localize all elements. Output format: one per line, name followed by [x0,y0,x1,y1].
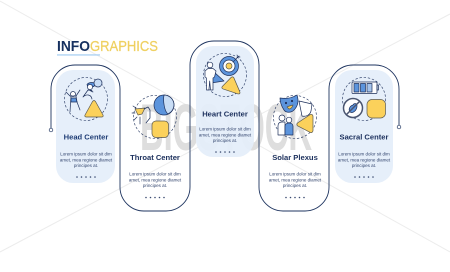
text block: amet, mea regione diamet [60,157,113,162]
heading: Solar Plexus [272,153,318,162]
icon: solar plexus [274,95,316,138]
text block: principes at. [352,163,376,168]
text block: Lorem ipsum dolor sit dim [60,152,112,156]
panel: head center [60,78,113,178]
text block: Lorem ipsum dolor sit dim [338,152,390,156]
text block: principes at. [74,163,98,168]
text block: amet, mea regione diamet [338,157,391,162]
text block: amet, mea regione diamet [199,132,252,137]
heading: Throat Center [130,153,180,162]
panel: solar plexus [269,95,322,198]
text block: principes at. [283,183,307,188]
panel: sacral center [338,78,391,178]
title: GRAPHICS [90,38,158,55]
heading: Heart Center [202,110,248,119]
text block [60,152,113,168]
pagination dots [215,151,235,153]
icon: heart center [204,54,246,96]
text block: principes at. [143,183,167,188]
text block [199,126,252,143]
icon: sacral center [342,78,386,120]
connecting outline [49,41,401,211]
text block: principes at. [213,138,237,143]
title: INFO [57,38,90,55]
pagination dots [285,197,305,198]
text block: amet, mea regione diamet [129,177,182,182]
heading: Head Center [64,132,108,142]
pagination dots [76,176,96,178]
text block: amet, mea regione diamet [269,177,322,182]
pagination dots [354,176,374,178]
panel backgrounds [56,46,393,183]
text block: Lorem ipsum dolor sit dim [269,172,321,176]
title [57,38,158,56]
text block [338,152,391,168]
icon: throat center [132,95,176,138]
text block [129,172,182,188]
text block: Lorem ipsum dolor sit dim [199,126,251,132]
text block [269,172,322,188]
heading: Sacral Center [340,132,389,142]
panel: heart center [199,54,252,153]
icon: head center [64,78,108,120]
pagination dots [145,197,165,198]
text block: Lorem ipsum dolor sit dim [129,172,181,176]
panel: throat center [129,95,182,198]
